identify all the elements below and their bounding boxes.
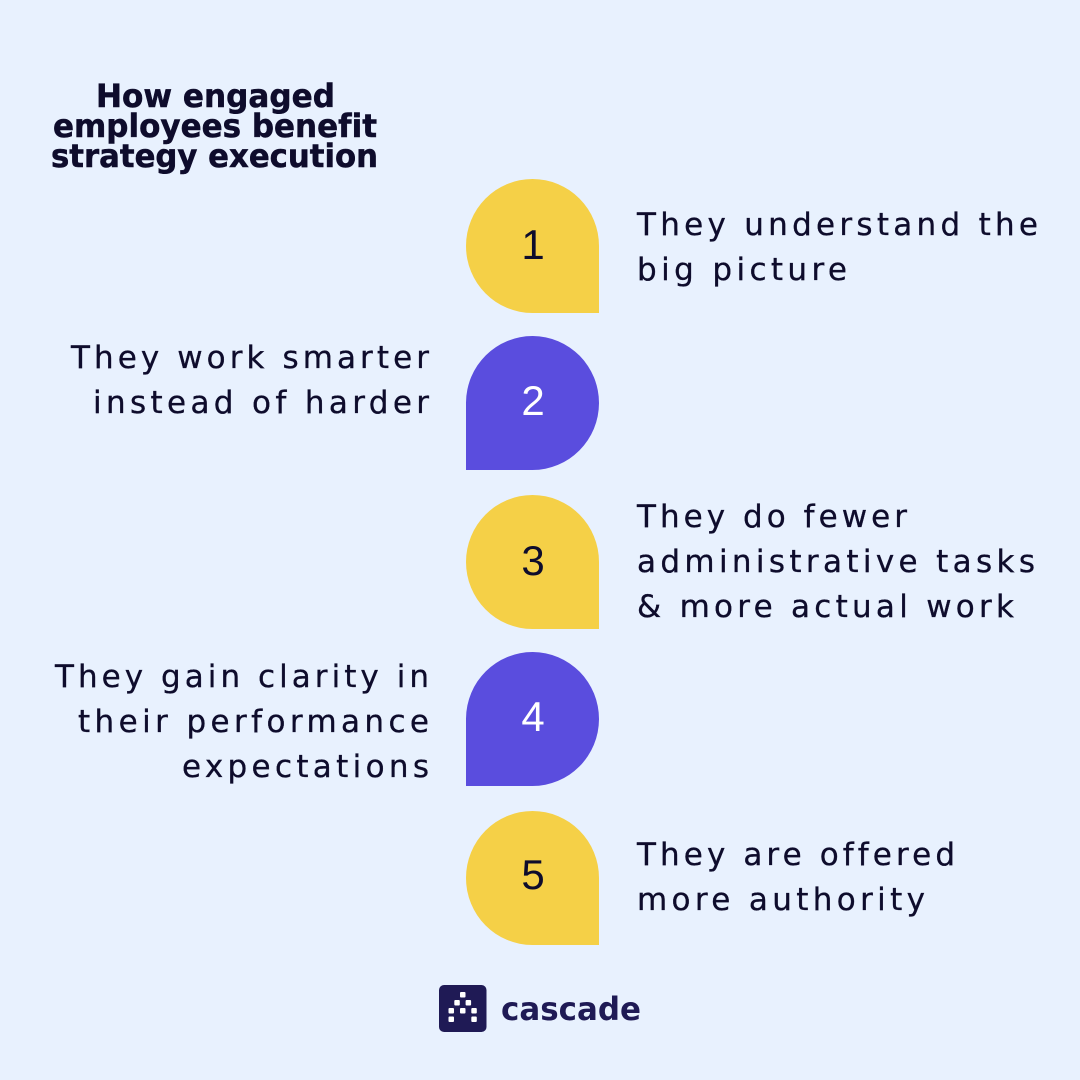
step 5 text: They are offered	[636, 837, 955, 873]
step 5 badge	[466, 811, 599, 945]
step 1 badge	[466, 179, 599, 313]
step 4 badge: 4	[521, 693, 545, 740]
step 2 text: instead of harder	[93, 385, 429, 421]
step 2 badge	[466, 336, 599, 470]
step 3 text	[636, 499, 1035, 625]
step 2 text: They work smarter	[70, 340, 429, 376]
step 5 text: more authority	[637, 882, 925, 918]
step 4 text: expectations	[182, 749, 429, 785]
step 3 badge	[466, 495, 599, 629]
title: employees benefit	[53, 107, 377, 145]
wordmark: cascade	[501, 990, 641, 1028]
step 4 badge	[466, 652, 599, 786]
logo: cascade	[439, 985, 641, 1032]
step 1 text: big picture	[637, 252, 847, 288]
title	[51, 77, 378, 175]
step 3 text: administrative tasks	[637, 544, 1035, 580]
step 5 text	[636, 837, 955, 918]
title: How engaged	[96, 77, 335, 115]
step 4 text	[54, 659, 429, 785]
step 3 text: They do fewer	[636, 499, 907, 535]
step 4 text: their performance	[78, 704, 429, 740]
step 2 badge: 2	[521, 377, 545, 424]
step 3 badge: 3	[521, 537, 545, 584]
step 3 text: & more actual work	[637, 589, 1014, 625]
step 1 badge: 1	[521, 221, 545, 268]
step 1 text: They understand the	[636, 207, 1038, 243]
step 1 text	[636, 207, 1038, 288]
icon: cascade mark	[439, 985, 486, 1032]
step 4 text: They gain clarity in	[54, 659, 429, 695]
title: strategy execution	[51, 137, 378, 175]
step 5 badge: 5	[521, 851, 545, 898]
step 2 text	[70, 340, 429, 421]
